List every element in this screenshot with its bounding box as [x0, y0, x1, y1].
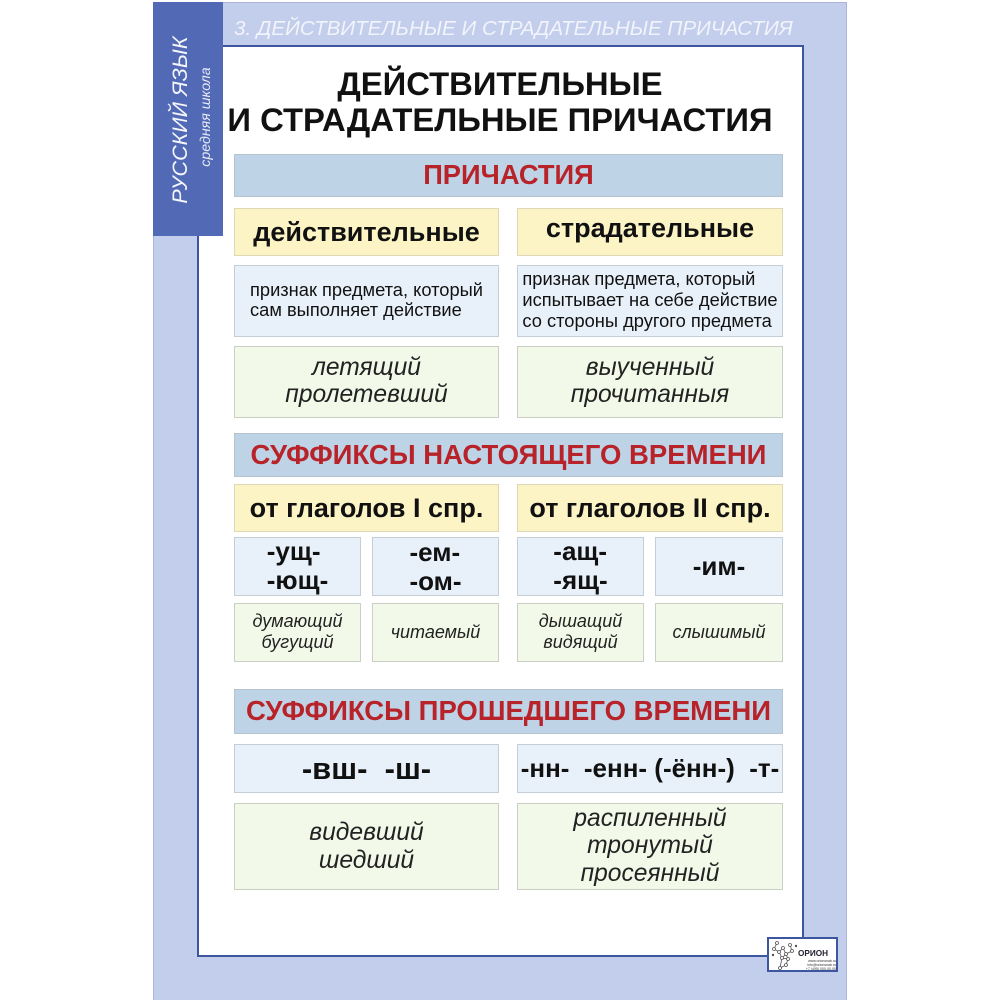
suffixes: ущ ющ — [234, 537, 361, 596]
logo contacts: www.orionsnab.ru — [808, 959, 836, 963]
examples: распиленный тронутый просеянный — [517, 803, 783, 890]
suffixes: ем ом: -ом- — [409, 566, 462, 596]
suffixes: ущ ющ: -ющ- — [267, 564, 328, 594]
examples: страдательные: прочитанныя — [571, 381, 729, 408]
heading: суффиксы прошедшего времени — [234, 689, 783, 734]
example: дышащий видящий: дышащий — [539, 610, 622, 630]
examples: распиленный тронутый просеянный: просеянный — [581, 860, 719, 887]
suffixes: нн енн т: -нн- -енн- (-ённ-) -т- — [521, 753, 779, 783]
suffixes: ащ ящ — [517, 537, 644, 596]
examples: видевший шедший — [234, 803, 499, 890]
poster background — [153, 2, 847, 1000]
side tab — [153, 2, 223, 236]
examples: распиленный тронутый просеянный: распиленный — [573, 805, 727, 832]
example: читаемый: читаемый — [391, 622, 480, 642]
icon: molecule — [772, 941, 798, 970]
definition: страдательные: испытывает на себе действие — [522, 288, 778, 310]
heading: суффиксы настоящего времени: СУФФИКСЫ НАСТОЯЩЕГО ВРЕМЕНИ — [251, 439, 766, 470]
suffixes: ащ ящ: -ящ- — [553, 564, 608, 594]
examples: действительные: летящий — [312, 354, 421, 380]
example: думающий бугущий: бугущий — [262, 632, 333, 652]
examples: страдательные: выученный — [586, 354, 714, 380]
label: II спряжение — [517, 484, 783, 532]
definition: страдательные: признак предмета, который — [522, 268, 755, 288]
label: действительные — [234, 208, 499, 256]
example: думающий бугущий: думающий — [252, 610, 342, 630]
definition: страдательные — [517, 265, 783, 337]
side tab subtitle: средняя школа — [198, 67, 214, 167]
examples: действительные — [234, 346, 499, 418]
label: I спряжение — [234, 484, 499, 532]
side tab title: РУССКИЙ ЯЗЫК — [168, 36, 192, 204]
suffixes: ем ом — [372, 537, 499, 596]
main title: ДЕЙСТВИТЕЛЬНЫЕ — [337, 64, 663, 102]
white content panel — [197, 45, 804, 957]
heading: суффиксы настоящего времени — [234, 433, 783, 477]
suffixes: вш ш: -вш- -ш- — [302, 750, 431, 786]
logo contacts — [806, 959, 836, 971]
label: I спряжение: от глаголов I спр. — [250, 492, 483, 522]
logo contacts: +7 (495) 000-00-00 — [806, 967, 836, 971]
main title — [227, 64, 773, 138]
logo name: ОРИОН — [798, 949, 828, 958]
label: действительные: действительные — [253, 216, 480, 246]
examples: страдательные — [517, 346, 783, 418]
label: страдательные — [517, 208, 783, 256]
suffixes: ущ ющ: -ущ- — [267, 536, 320, 566]
examples: распиленный тронутый просеянный: тронутый — [587, 832, 713, 859]
example: слышимый — [655, 603, 783, 662]
top band title: 3. ДЕЙСТВИТЕЛЬНЫЕ И СТРАДАТЕЛЬНЫЕ ПРИЧАСТИЯ — [234, 17, 793, 40]
heading: причастия: ПРИЧАСТИЯ — [423, 159, 594, 190]
heading: причастия — [234, 154, 783, 197]
definition: действительные: сам выполняет действие — [250, 299, 462, 320]
definition: действительные: признак предмета, который — [250, 278, 483, 300]
suffix: им: -им- — [693, 551, 745, 581]
suffix: им — [655, 537, 783, 596]
heading: суффиксы прошедшего времени: СУФФИКСЫ ПРОШЕДШЕГО ВРЕМЕНИ — [246, 695, 771, 726]
logo contacts: info@orionsnab.ru — [807, 963, 836, 967]
examples: видевший шедший: шедший — [319, 846, 414, 874]
suffixes: нн енн т — [517, 744, 783, 793]
publisher logo — [767, 937, 838, 972]
example: дышащий видящий — [517, 603, 644, 662]
label: страдательные: страдательные — [546, 213, 754, 243]
main title: И СТРАДАТЕЛЬНЫЕ ПРИЧАСТИЯ — [227, 101, 773, 138]
example: читаемый — [372, 603, 499, 662]
suffixes: ем ом: -ем- — [409, 536, 460, 566]
example: думающий бугущий — [234, 603, 361, 662]
example: слышимый: слышимый — [673, 622, 765, 642]
example: дышащий видящий: видящий — [543, 632, 618, 652]
suffixes: ащ ящ: -ащ- — [553, 536, 607, 566]
examples: видевший шедший: видевший — [309, 818, 424, 846]
suffixes: вш ш — [234, 744, 499, 793]
examples: действительные: пролетевший — [285, 381, 448, 408]
definition: страдательные: со стороны другого предмета — [522, 310, 772, 330]
definition: действительные — [234, 265, 499, 337]
label: II спряжение: от глаголов II спр. — [529, 492, 771, 522]
